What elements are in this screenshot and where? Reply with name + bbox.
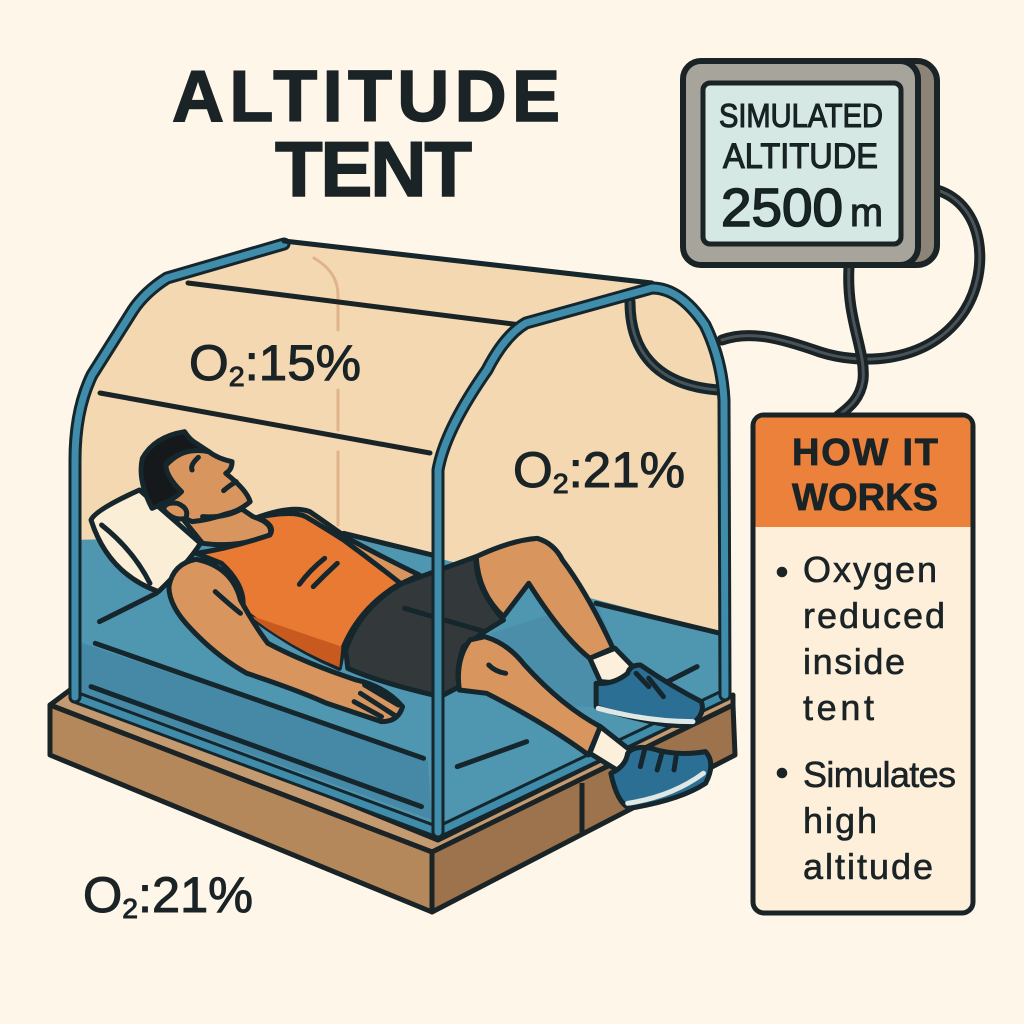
panel bullets: Simulates [803, 754, 956, 795]
pillow and athlete [91, 432, 711, 808]
arm and finger lines [215, 592, 398, 717]
base left face [50, 705, 432, 912]
title: ALTITUDE [172, 57, 560, 137]
tent ridge [284, 241, 652, 283]
oxygen label inside right: 2 [553, 468, 569, 499]
tent frame [75, 241, 725, 832]
oxygen label outside: 2 [122, 893, 138, 924]
title [172, 57, 560, 213]
panel heading: HOW IT [792, 432, 938, 474]
monitor readout: SIMULATED [719, 97, 883, 134]
oxygen label inside top: O [189, 335, 228, 391]
panel bullets: high [803, 800, 877, 841]
eye, mouth and jaw [192, 457, 243, 517]
near shoe [611, 747, 711, 808]
monitor [683, 61, 937, 265]
tent front arch [438, 288, 725, 832]
monitor screen [703, 83, 901, 244]
platform base [50, 690, 735, 912]
shorts [346, 557, 504, 697]
tent back arch [75, 244, 284, 697]
tent interior wall [72, 242, 725, 838]
far sock [590, 648, 636, 683]
oxygen label inside right: :21% [569, 442, 685, 498]
panel heading [792, 432, 938, 519]
near sock [590, 727, 630, 773]
ear [163, 503, 187, 519]
inner air hose [630, 302, 718, 390]
hair [141, 432, 209, 508]
monitor readout [719, 97, 883, 238]
panel bullets: tent [803, 687, 874, 728]
monitor readout: m [850, 191, 883, 235]
title: TENT [275, 125, 472, 213]
near leg [458, 637, 600, 755]
tent frame bottom edges [75, 695, 725, 832]
neck [184, 507, 271, 545]
oxygen label outside: :21% [138, 867, 253, 923]
monitor readout: ALTITUDE [723, 137, 878, 176]
tank top creases [299, 558, 337, 587]
torso tank top [196, 513, 400, 668]
panel box [753, 415, 973, 913]
panel header [756, 418, 970, 527]
mattress [72, 533, 724, 832]
cables [722, 190, 980, 416]
panel bullets: reduced [803, 595, 945, 636]
oxygen label inside top: :15% [245, 335, 361, 391]
athlete [141, 432, 711, 808]
far leg [476, 538, 613, 658]
monitor readout: 2500 [721, 178, 843, 238]
oxygen label inside right: O [513, 442, 552, 498]
base top band [50, 690, 733, 852]
panel bullets [777, 549, 956, 887]
panel heading: WORKS [792, 477, 938, 519]
near arm [169, 559, 403, 722]
monitor body [700, 61, 937, 265]
base right face [432, 705, 735, 912]
head [163, 450, 250, 522]
far shoe [596, 665, 702, 725]
panel bullets: altitude [803, 846, 933, 887]
tent back seam [314, 258, 338, 525]
panel bullets: Oxygen [803, 549, 937, 590]
pillow [91, 490, 200, 592]
tank top shadow [249, 615, 341, 667]
roof panel lines [100, 283, 521, 453]
far arm [259, 509, 419, 585]
oxygen label inside top: 2 [229, 361, 245, 392]
panel bullets: inside [803, 641, 905, 682]
oxygen label outside: O [83, 867, 122, 923]
panel: how it works [753, 415, 973, 913]
